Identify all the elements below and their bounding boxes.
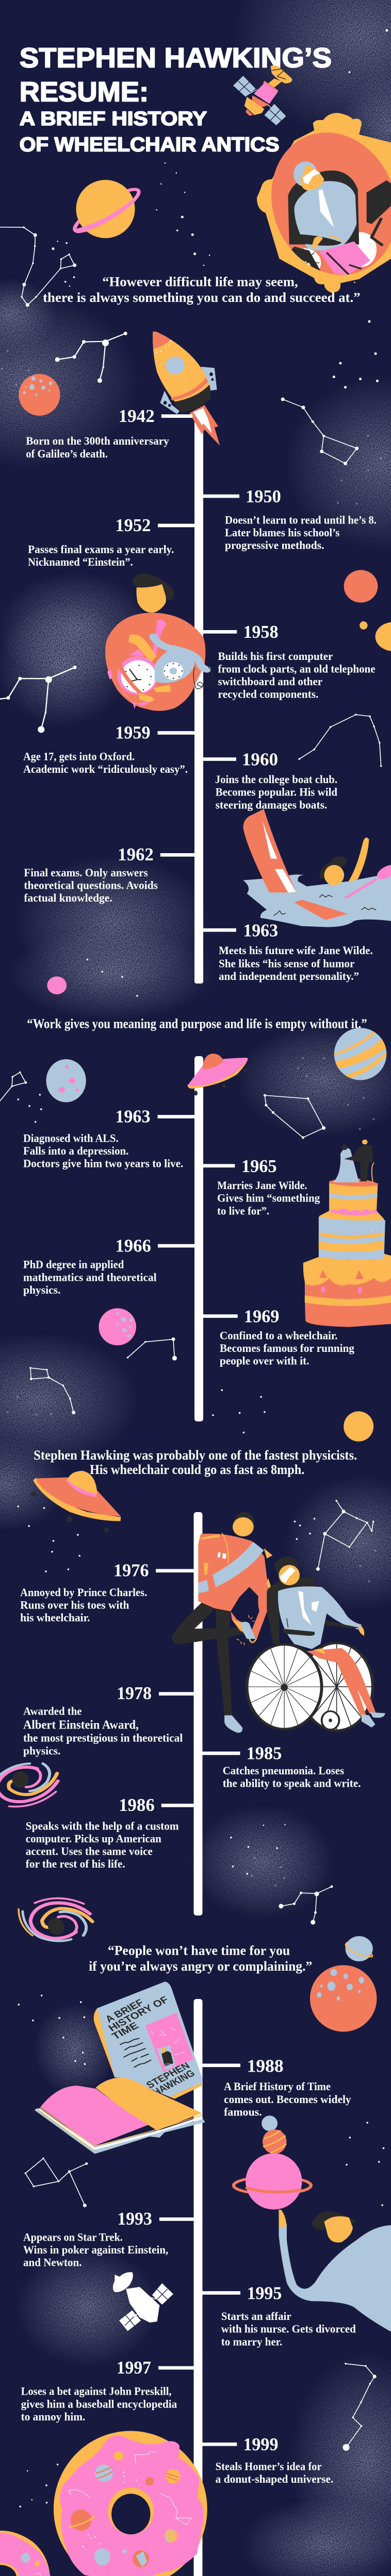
section: 1986 to 1995 (16, 1888, 384, 2229)
entry: 1958: 1958 (243, 622, 278, 642)
illustration: balancing planets (234, 2115, 311, 2210)
stars (53, 30, 387, 286)
text: Prince Charles continued (20, 1599, 129, 1624)
section: header (0, 30, 391, 305)
entry: 1993 text: and Newton. (23, 2257, 82, 2269)
text: Jane Wilde continued: She likes “his sense of humor (219, 958, 354, 970)
entry: 1965: Gives him “something (217, 1192, 320, 1205)
constellation (346, 2364, 374, 2447)
entry: 1942: of Galileo’s death. (26, 448, 108, 460)
entry: 1993 (117, 2209, 194, 2229)
entry: 1960: Becomes popular. His wild (216, 786, 337, 799)
quote: “However difficult life may seem, (102, 275, 298, 290)
text: Prince Charles continued: Runs over his toes with (20, 1599, 129, 1612)
entry: 1986: accent. Uses the same voice (26, 1845, 153, 1858)
planets (344, 570, 391, 651)
entry: 1965: 1965 (241, 1156, 277, 1176)
text: Prince Charles continued: his wheelchair. (20, 1612, 90, 1624)
entry: 1962: factual knowledge. (24, 892, 112, 904)
entry: 1986: for the rest of his life. (26, 1858, 125, 1870)
entry: 1997: 1997 (117, 2358, 151, 2378)
entry: 1995 (202, 2283, 356, 2348)
dust specks (8, 1397, 376, 1581)
entry: 1942 (26, 406, 192, 460)
quote (89, 1943, 312, 1974)
title: A BRIEF HISTORY (20, 108, 207, 129)
section: 1942 to 1958 (2, 321, 391, 651)
entry: 1985: Catches pneumonia. Loses (223, 1765, 344, 1777)
entry: 1962: theoretical questions. Avoids (24, 879, 158, 892)
entry: 1997: to annoy him. (21, 2411, 85, 2423)
stars (20, 2465, 58, 2506)
icon: pink planet (47, 976, 67, 994)
section: 1966 to 1976 (8, 1272, 376, 1599)
title: STEPHEN HAWKING’S (20, 42, 332, 73)
statement: His wheelchair could go as fast as 8mph. (90, 1463, 304, 1477)
entry: 1950: Later blames his school’s (225, 527, 340, 539)
constellation (283, 399, 357, 464)
entry: 1999: a donut-shaped universe. (216, 2473, 333, 2486)
entry: 1960: steering damages boats. (216, 799, 327, 811)
constellation (57, 333, 125, 381)
entry: 1978: the most prestigious in theoretical (23, 1732, 183, 1744)
entry: 1976: Annoyed by Prince Charles. (20, 1586, 147, 1599)
entry: Builds text: recycled components. (218, 688, 318, 701)
entry: 1997: Loses a bet against John Preskill, (21, 2385, 172, 2398)
entry: 1963 Jane: 1963 (243, 920, 278, 940)
title: RESUME: (20, 76, 149, 107)
entry: 1969: 1969 (244, 1306, 279, 1327)
entry: 1952 (28, 515, 194, 568)
entry: 1997: gives him a baseball encyclopedia (21, 2398, 177, 2411)
entry: 1963 ALS: Diagnosed with ALS. (23, 1132, 119, 1145)
illustration: Prince Charles and Hawking (172, 1512, 385, 1733)
entry: 1950 (203, 486, 377, 552)
constellation (299, 715, 381, 766)
entry: 1995: with his nurse. Gets divorced (221, 2323, 356, 2335)
text: PhD continued: mathematics and theoretical (23, 1272, 157, 1284)
entry: 1978: Awarded the (23, 1705, 82, 1718)
stars (18, 1390, 315, 1571)
book cover text: TIME (110, 2021, 141, 2042)
illustration: small donut (0, 2531, 53, 2576)
constellation (0, 227, 75, 305)
section: 1976 to 1986 (0, 1512, 385, 1922)
entry: 1962: 1962 (118, 844, 154, 865)
icon: rocket (153, 331, 220, 446)
entry: 1995: to marry her. (221, 2336, 282, 2348)
entry: 1969: Becomes famous for running (220, 1342, 354, 1354)
entry: 1993: 1993 (117, 2209, 152, 2229)
quote: “People won’t have time for you (108, 1943, 290, 1958)
icon: black hole galaxy (16, 1888, 97, 1952)
illustration: young Hawking building a computer (105, 573, 213, 711)
entry: 1963 ALS: Falls into a depression. (23, 1145, 128, 1157)
entry: 1965 (203, 1156, 320, 1217)
stars (231, 1838, 277, 1874)
icon: ringed planet (69, 180, 144, 238)
icon: UFO (188, 1054, 248, 1096)
entry: 1986: Speaks with the help of a custom (26, 1820, 179, 1833)
entry: 1993 text: Wins in poker against Einstein, (23, 2244, 168, 2256)
title: OF WHEELCHAIR ANTICS (20, 133, 279, 156)
entry: 1952: Nicknamed “Einstein”. (28, 556, 133, 568)
section: 1993 to 1999 (0, 2210, 391, 2576)
icon: white satellite (113, 2272, 173, 2331)
entry: 1978 (23, 1683, 194, 1757)
entry: 1978: Albert Einstein Award, (23, 1718, 139, 1732)
entry: 1978: physics. (23, 1744, 60, 1757)
entry: 1969 (203, 1306, 354, 1367)
constellation (281, 1887, 332, 1922)
entry: 1966: 1966 (115, 1235, 151, 1256)
entry: 1966: PhD degree in applied (23, 1259, 124, 1271)
book cover text: A BRIEF (104, 1997, 146, 2025)
book cover text: STEPHEN (144, 2060, 192, 2091)
entry: 1959: 1959 (115, 722, 151, 743)
entry: 1995: 1995 (247, 2283, 282, 2303)
illustration: large space donut (54, 2431, 207, 2576)
stars (18, 959, 137, 1122)
entry: 1963 Jane (203, 920, 373, 957)
section: 1958 to 1963 (0, 573, 391, 957)
entry: 1988: A Brief History of Time (224, 2080, 331, 2093)
entry: 1995: Starts an affair (221, 2310, 291, 2323)
entry: 1985 (202, 1743, 361, 1790)
book cover text: HAWKING (151, 2068, 197, 2098)
entry: 1999: 1999 (243, 2434, 278, 2454)
constellation (265, 1095, 324, 1138)
stars (19, 1995, 384, 2205)
entry: 1985: 1985 (247, 1743, 282, 1764)
entry: 1962: Final exams. Only answers (24, 867, 148, 879)
entry: 1958 (203, 622, 278, 642)
entry: 1963 ALS: 1963 (115, 1106, 151, 1126)
illustration: Hawking portrait in mirror (257, 113, 391, 293)
icon: coral planet (310, 1965, 377, 2032)
entry: 1963 ALS: Doctors give him two years to live. (23, 1158, 183, 1170)
entry: Builds text: switchboard and other (218, 675, 322, 688)
entry: 1993 text (23, 2231, 168, 2269)
illustration: capsized boat (243, 809, 391, 927)
entry: Builds text: Builds his first computer (218, 650, 333, 663)
entry: 1993 text: Appears on Star Trek. (23, 2231, 123, 2244)
entry: 1960: 1960 (242, 749, 278, 770)
entry: 1986: computer. Picks up American (26, 1833, 161, 1845)
entry: 1976: 1976 (113, 1560, 149, 1580)
entry: 1965: Marries Jane Wilde. (217, 1179, 307, 1192)
entry: 1960: Joins the college boat club. (215, 773, 337, 786)
entry: 1986 (26, 1794, 194, 1870)
entry: 1950: 1950 (246, 486, 281, 506)
quote (43, 275, 361, 305)
constellation (25, 2158, 87, 2206)
entry: 1962 (24, 844, 194, 904)
stars small (27, 2471, 32, 2500)
constellation (30, 1368, 74, 1413)
dust specks (298, 1058, 373, 1129)
constellation (128, 1339, 174, 1358)
dust specks (2, 351, 381, 504)
quote: if you’re always angry or complaining.” (89, 1959, 312, 1974)
title (20, 42, 332, 156)
entry: 1963 ALS (23, 1106, 194, 1170)
text: PhD continued (23, 1272, 157, 1296)
dust specks (252, 1858, 284, 1886)
entry: 1942: 1942 (119, 406, 155, 426)
entry: 1960 (203, 749, 337, 811)
entry: 1952: Passes final exams a year early. (28, 544, 174, 556)
entry: 1999: Steals Homer’s idea for (216, 2461, 322, 2473)
entry: 1988: famous. (224, 2106, 262, 2119)
entry: 1942: Born on the 300th anniversary (26, 435, 169, 448)
illustration: wedding cake (303, 1140, 391, 1327)
text: PhD continued: physics. (23, 1284, 60, 1296)
entry: Builds text (218, 650, 376, 701)
icon: orange planet (344, 1411, 373, 1442)
icon: small ringed planet (346, 1936, 373, 1961)
entry: 1978: 1978 (117, 1683, 152, 1703)
entry: 1988: 1988 (247, 2056, 284, 2076)
entry: 1965: to live for”. (217, 1205, 269, 1217)
statement (34, 1448, 357, 1477)
icon: pink planet (99, 1308, 136, 1345)
entry: 1988 (202, 2056, 351, 2119)
icon: black hole galaxy (0, 1764, 58, 1807)
entry: 1959: Academic work “ridiculously easy”. (23, 763, 188, 776)
icon: striped planet (333, 1028, 388, 1080)
entry: 1969: people over with it. (220, 1355, 309, 1367)
entry: 1966 (23, 1235, 194, 1271)
illustration: woman with planets (279, 2210, 391, 2332)
book cover text (104, 1994, 197, 2098)
book cover text: HISTORY OF (106, 1994, 171, 2033)
entry: 1986: 1986 (119, 1794, 155, 1815)
icon: UFO (30, 1471, 121, 1533)
entry: 1999 (202, 2434, 333, 2486)
entry: 1988: comes out. Becomes widely (224, 2093, 351, 2106)
constellation (0, 667, 75, 730)
entry: 1952: 1952 (115, 515, 151, 535)
constellation (0, 1072, 26, 1101)
section: 1963 to 1966 (0, 958, 391, 1327)
stars (334, 321, 377, 387)
icon: coral planet (19, 374, 60, 416)
entry: 1997 (21, 2358, 194, 2423)
entry: 1959 (23, 722, 194, 776)
constellation (318, 1501, 373, 1569)
entry: 1959: Age 17, gets into Oxford. (23, 751, 135, 763)
icon: spotted planet (46, 1059, 86, 1102)
entry: 1976 (20, 1560, 194, 1599)
entry: 1969: Confined to a wheelchair. (220, 1330, 338, 1342)
entry: 1950: progressive methods. (225, 539, 324, 552)
text: Jane Wilde continued (219, 958, 359, 982)
timeline bars (194, 415, 203, 2576)
icon: satellite (233, 65, 292, 125)
illustration: A Brief History of Time book (35, 1982, 205, 2154)
